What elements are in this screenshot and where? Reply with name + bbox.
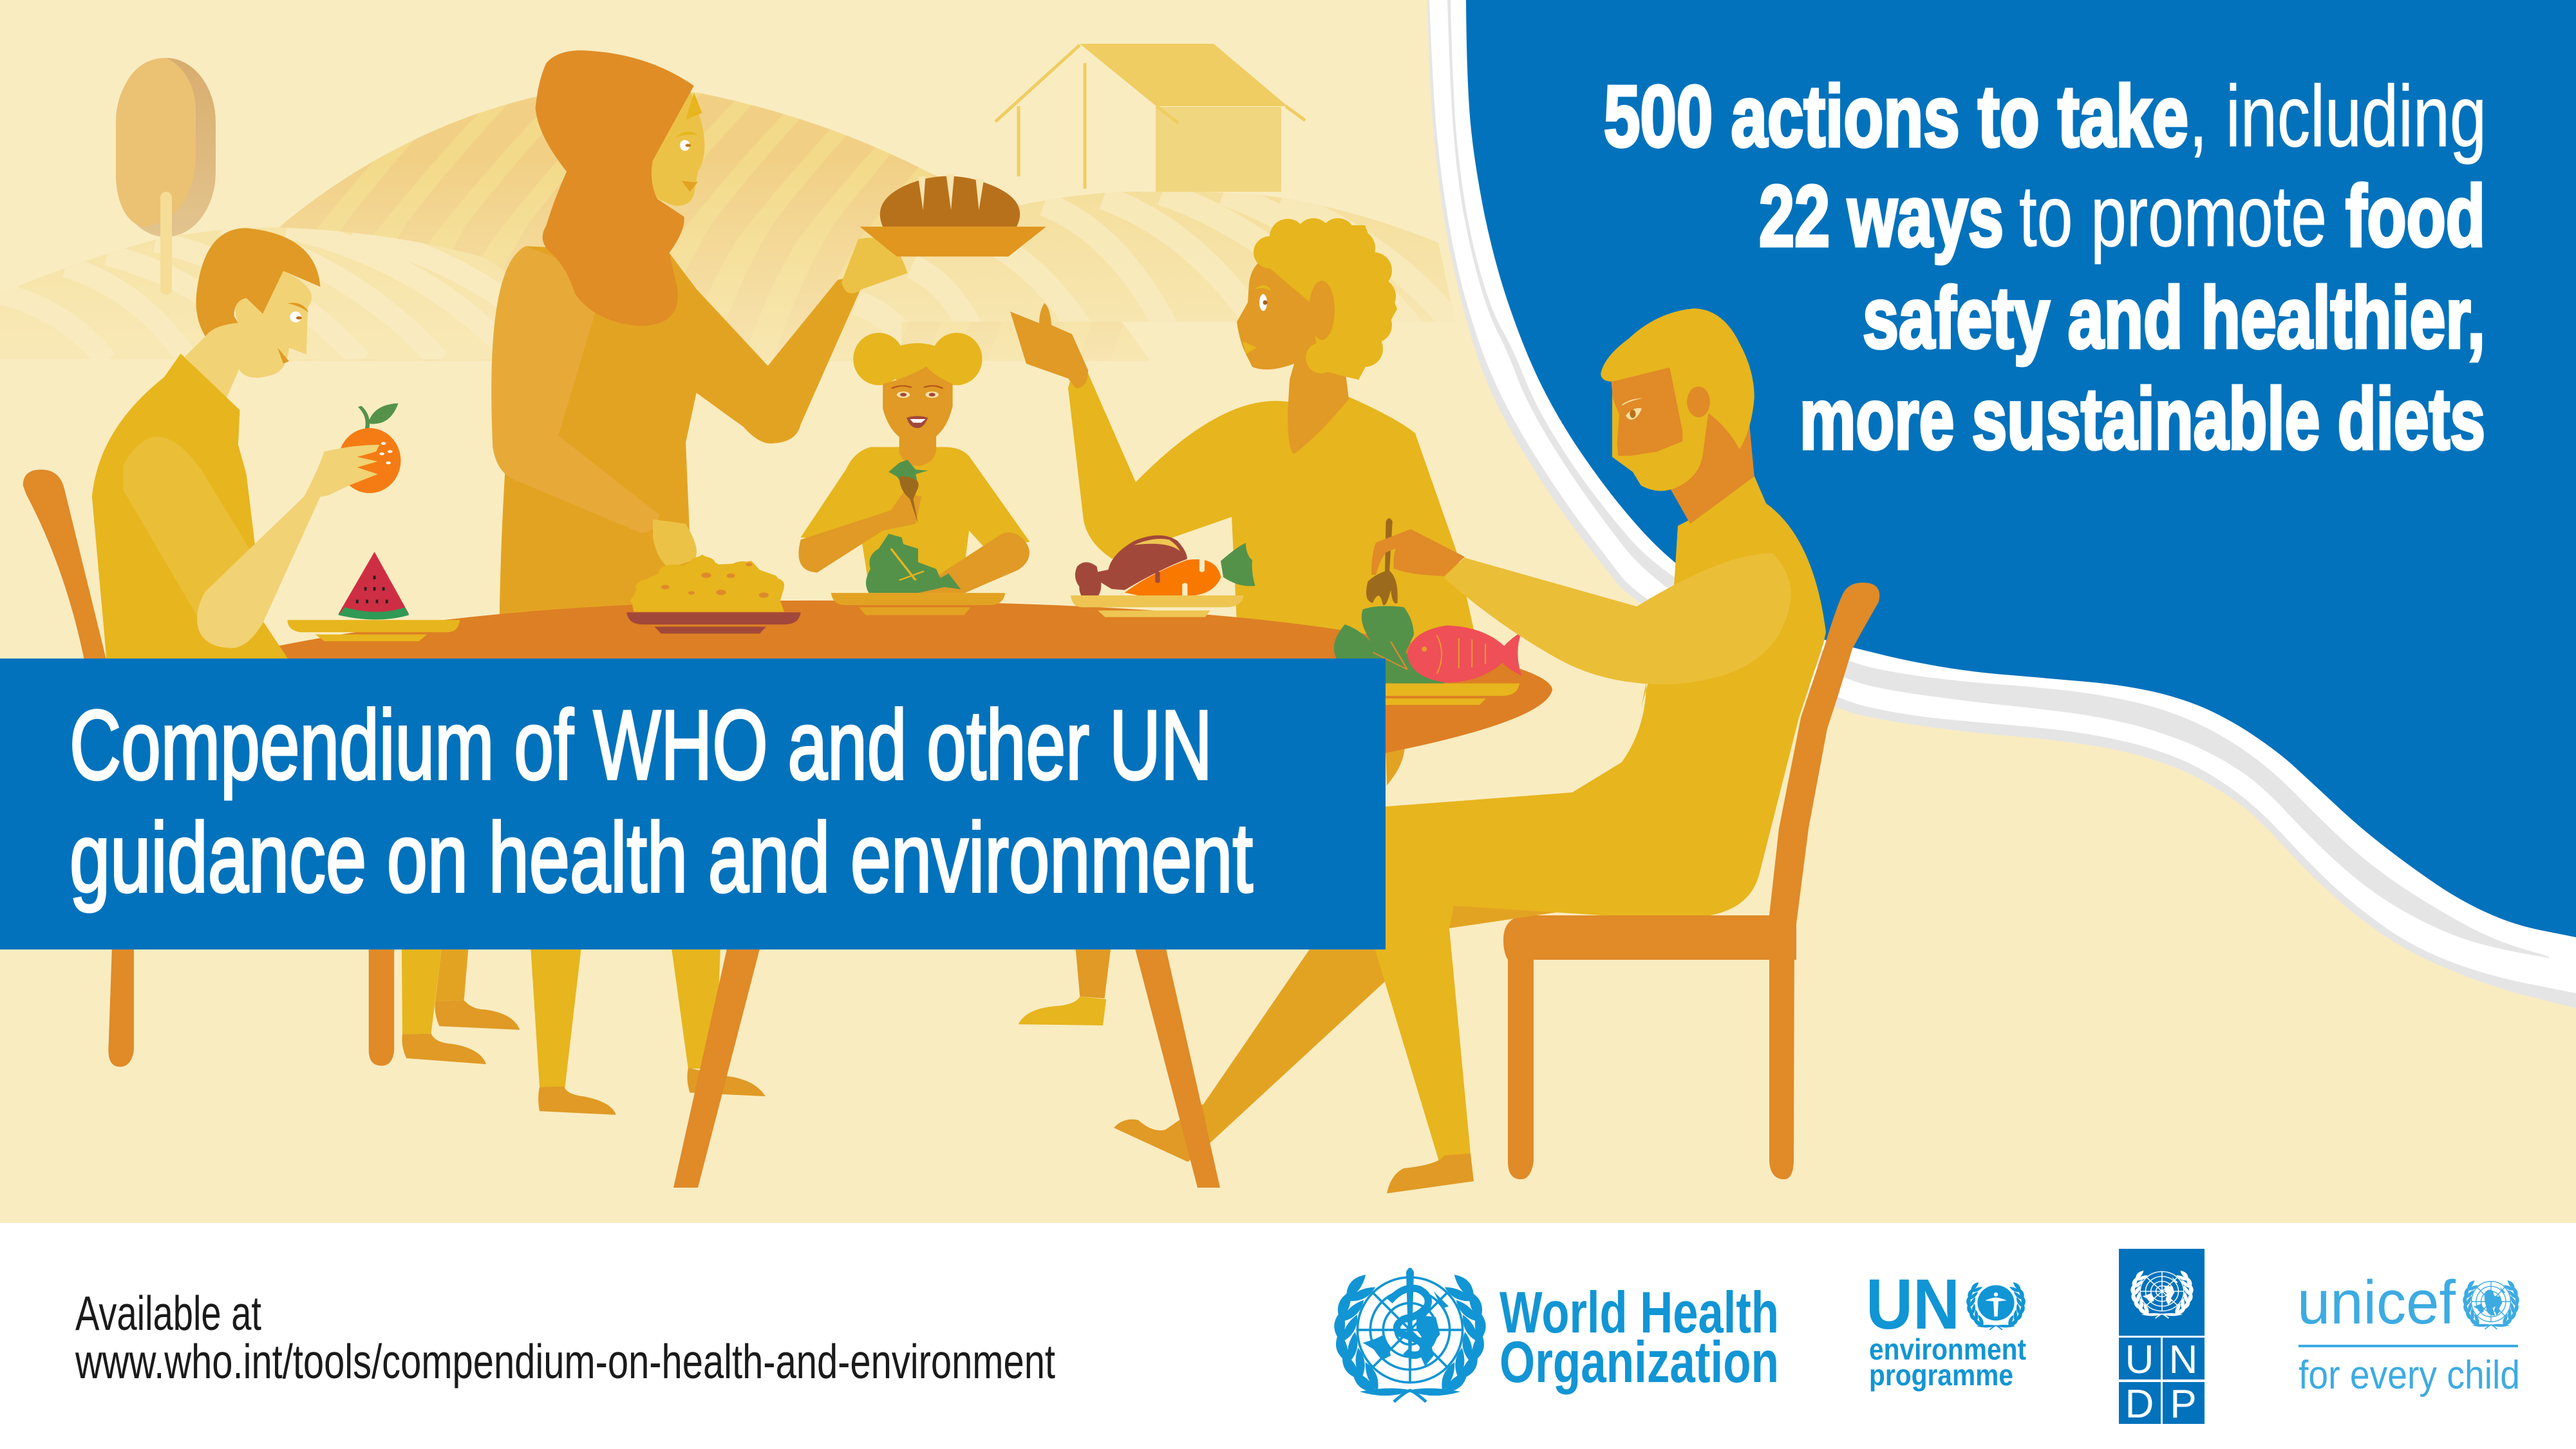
seated boy <box>23 228 1005 662</box>
torso and front leg <box>1352 476 1826 1161</box>
neck and face <box>899 433 936 466</box>
boy's legs and shoes <box>402 932 520 1064</box>
hair sliver and eye <box>675 93 702 138</box>
ear <box>1309 281 1335 340</box>
logo: unicef <box>2297 1268 2520 1398</box>
lip and eye <box>1243 341 1257 354</box>
UNDP letter tiles: P <box>2170 1382 2197 1426</box>
eye <box>277 303 309 364</box>
raised hand <box>1010 303 1088 388</box>
chicken, carrot and fish plates <box>1071 518 1521 705</box>
face <box>1612 368 1682 456</box>
hair and beard <box>1601 308 1754 491</box>
footer strip <box>0 1223 2576 1449</box>
title <box>70 690 1253 913</box>
face <box>652 90 704 206</box>
icon: UNEP emblem <box>1966 1280 2026 1330</box>
call-out text: 500 actions: 22 ways <box>1759 167 2004 265</box>
title: guidance on health and environment <box>70 803 1253 913</box>
arms <box>798 492 921 573</box>
seated woman with curly hair <box>1010 218 1484 676</box>
greens <box>1334 606 1447 684</box>
logo: UN environment programme <box>1866 1265 2026 1392</box>
table legs <box>673 949 1220 1188</box>
bread <box>880 174 1020 227</box>
organisation name: Organization <box>1500 1330 1779 1395</box>
right front hill <box>852 192 1455 346</box>
headscarf <box>536 50 694 326</box>
neck and face <box>1237 251 1349 454</box>
fork <box>1366 518 1398 605</box>
icon: UNICEF emblem <box>2462 1278 2520 1329</box>
icon: WHO emblem <box>1331 1267 1489 1402</box>
hand holding fork <box>1371 529 1465 576</box>
eyes and mouth <box>892 386 943 428</box>
call-out text: 500 actions <box>1604 68 2487 467</box>
girl <box>798 333 1029 596</box>
organisation name: World Health <box>1500 1280 1779 1345</box>
availability text <box>75 1286 1055 1388</box>
logo: unicef: for every child <box>2299 1353 2520 1398</box>
hair <box>196 228 320 337</box>
chair back <box>23 470 107 662</box>
UNDP letter tiles: N <box>2169 1338 2197 1382</box>
left front hill <box>0 227 505 359</box>
face <box>205 271 312 378</box>
organisation name <box>1500 1280 1779 1395</box>
pigtail hair <box>853 333 982 385</box>
front shoe <box>1387 1154 1474 1193</box>
rice plate <box>626 554 801 633</box>
logo: UNDP <box>2119 1249 2205 1426</box>
chair <box>1503 583 1879 1179</box>
seated woman's leg and shoe <box>1019 932 1113 1025</box>
curly hair <box>1254 218 1397 380</box>
boy's chair legs <box>108 932 394 1067</box>
ear <box>1687 386 1710 417</box>
availability text: Available at <box>75 1286 261 1340</box>
plate and watermelon <box>287 552 460 641</box>
call-out text: 500 actions: , including <box>2189 68 2487 165</box>
call-out text: 500 actions: to promote <box>2019 167 2327 265</box>
fish plate <box>1358 684 1519 705</box>
neck <box>1669 397 1754 524</box>
greens <box>866 534 961 593</box>
blue corner panel with layered ribbon bands <box>1427 0 2576 1008</box>
UNDP letter tiles: U <box>2125 1338 2154 1382</box>
wordmark: programme <box>1869 1358 2013 1392</box>
standing woman's legs and shoes <box>530 932 766 1115</box>
left arm <box>491 246 659 533</box>
logo: World Health Organization <box>1331 1267 1779 1402</box>
forearm and hand <box>197 445 379 648</box>
back shoe <box>1114 1104 1210 1162</box>
fork with broccoli <box>888 460 928 499</box>
background fields and hills <box>0 92 1455 361</box>
big back hill <box>278 92 1150 361</box>
availability text: www.who.int/tools/compendium-on-health-and-environment <box>75 1334 1055 1388</box>
standing woman <box>491 50 1046 632</box>
UNDP letter tiles <box>2119 1338 2205 1426</box>
lower hand <box>653 519 697 568</box>
logo: unicef: unicef <box>2297 1268 2456 1337</box>
wordmark: environment <box>1869 1332 2026 1366</box>
fish <box>1407 626 1521 683</box>
call-out text: 500 actions: food <box>2346 167 2485 265</box>
blue title panel <box>0 659 1386 949</box>
girl's plate <box>831 593 1005 615</box>
dress <box>500 246 861 632</box>
icon: tree <box>116 58 216 295</box>
raised hand <box>841 238 907 294</box>
wordmark <box>1866 1265 2026 1392</box>
back leg <box>1203 869 1563 1143</box>
roast chicken <box>1075 536 1187 596</box>
bowl <box>860 227 1046 256</box>
table <box>279 601 1552 760</box>
icon: farmhouse <box>995 44 1305 192</box>
body and arm <box>1068 369 1484 676</box>
chicken plate <box>1071 595 1244 617</box>
orange fruit <box>339 403 400 493</box>
neck <box>185 337 247 400</box>
call-out text: 500 actions: 500 actions to take <box>1604 68 2188 165</box>
sweater <box>801 447 1029 596</box>
title: Compendium of WHO and other UN <box>70 690 1212 800</box>
shirt <box>92 353 290 662</box>
afro woman's skirt sliver <box>1386 747 1405 785</box>
carrot <box>1125 543 1255 596</box>
UNDP letter tiles: D <box>2125 1382 2154 1426</box>
icon: UN emblem <box>2130 1269 2194 1318</box>
legs and feet under the table <box>108 932 1113 1115</box>
sleeve <box>123 437 256 623</box>
seated man with beard <box>1114 308 1879 1193</box>
sleeve <box>1443 553 1791 684</box>
wordmark: UN <box>1866 1265 1960 1344</box>
